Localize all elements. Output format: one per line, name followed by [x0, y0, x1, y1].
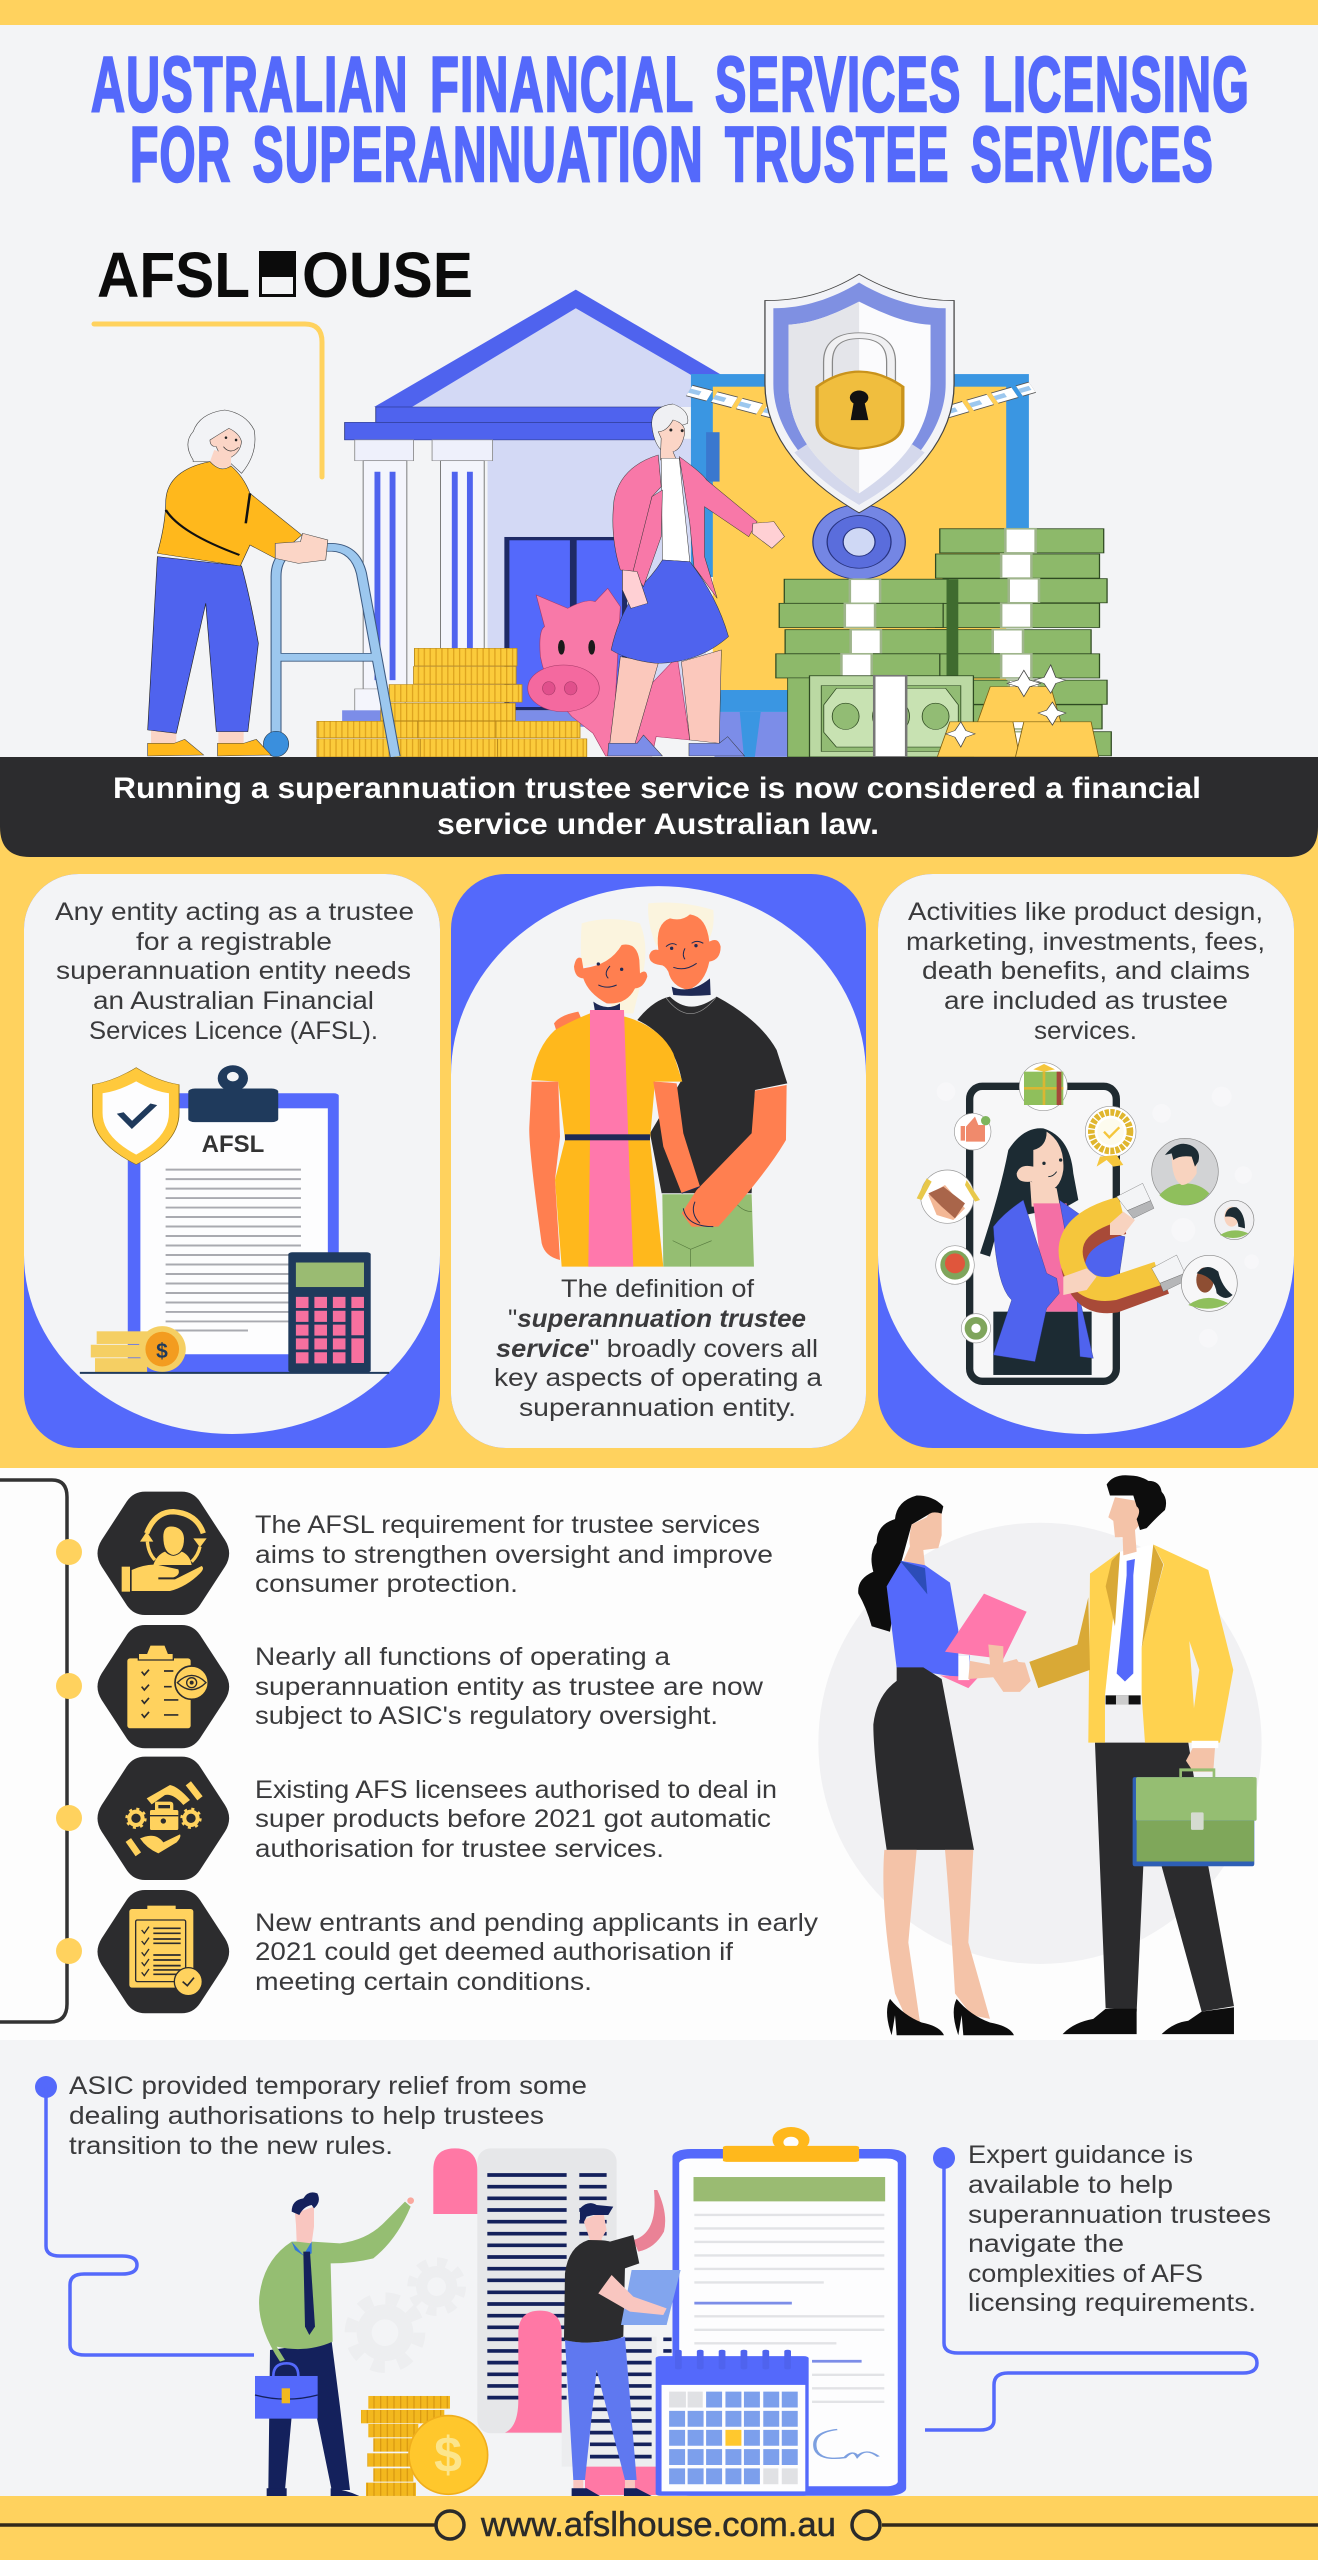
icon: hand holding person	[97, 1492, 229, 1615]
connector: left note	[35, 2076, 254, 2355]
item 4: deemed authorisation	[97, 1890, 819, 2013]
elderly woman in pink jacket	[608, 404, 784, 756]
panel: definition of superannuation trustee service	[451, 874, 866, 1448]
note: temporary relief: ASIC provided temporary relief from some	[69, 2072, 587, 2100]
panel text	[494, 1275, 822, 1422]
hero background objects	[317, 274, 1111, 757]
text: aims to strengthen oversight and improve	[255, 1541, 773, 1569]
note: expert guidance: superannuation trustees	[968, 2201, 1271, 2229]
panel text: marketing, investments, fees,	[906, 928, 1265, 956]
logo: AFSL House: OUSE	[302, 239, 473, 311]
panel text: The definition of	[561, 1275, 754, 1303]
panel text	[906, 898, 1265, 1045]
hero illustration	[148, 274, 1111, 757]
panel text: for a registrable	[136, 928, 332, 956]
note: expert guidance: available to help	[968, 2171, 1173, 2199]
text	[255, 1909, 819, 1996]
panel text: service " broadly covers all	[496, 1335, 818, 1363]
icon: clipboard checklist	[97, 1890, 229, 2013]
text: Existing AFS licensees authorised to deal in	[255, 1776, 777, 1804]
panel text: Any entity acting as a trustee	[55, 898, 414, 926]
icon: clipboard, shield, calculator, coins	[80, 1065, 389, 1373]
shield with padlock	[765, 274, 954, 579]
text: New entrants and pending applicants in early	[255, 1909, 819, 1937]
gears and document scroll	[351, 2148, 672, 2495]
gold coin stacks	[317, 648, 587, 757]
gold bars with sparkles	[937, 665, 1099, 757]
people and coin stack	[255, 2190, 681, 2496]
vault door with chains	[689, 374, 1032, 757]
text: Nearly all functions of operating a	[255, 1643, 670, 1671]
connector: right note	[925, 2147, 1257, 2430]
footer	[0, 2496, 1318, 2560]
text: authorisation for trustee services.	[255, 1835, 664, 1863]
panel text: services.	[1034, 1017, 1137, 1045]
panel text: are included as trustee	[944, 987, 1228, 1015]
icon: dollar on coin: $	[156, 1340, 168, 1363]
calendar	[656, 2351, 809, 2496]
banner: service under Australian law.	[437, 808, 879, 841]
text: 2021 could get deemed authorisation if	[255, 1938, 733, 1966]
text: consumer protection.	[255, 1570, 518, 1598]
panel text: key aspects of operating a	[494, 1364, 822, 1392]
elderly woman with walker	[148, 410, 395, 757]
panel text: Activities like product design,	[908, 898, 1263, 926]
piggy bank	[528, 588, 690, 756]
text: superannuation entity as trustee are now	[255, 1673, 764, 1701]
hero foreground people and piggy bank	[148, 404, 784, 757]
note: expert guidance	[968, 2141, 1271, 2317]
text	[255, 1776, 777, 1863]
text: meeting certain conditions.	[255, 1968, 592, 1996]
item 3: automatic authorisation	[97, 1757, 777, 1880]
logo: AFSL House: AFSL	[97, 239, 250, 311]
clipboard with form	[672, 2127, 906, 2496]
text: super products before 2021 got automatic	[255, 1805, 771, 1833]
panel text: an Australian Financial	[93, 987, 374, 1015]
icon: clipboard with eye	[97, 1625, 229, 1748]
illustration: team with scroll, clipboard and calendar	[255, 2127, 906, 2496]
panel text: Services Licence (AFSL).	[89, 1017, 378, 1045]
note: expert guidance: Expert guidance is	[968, 2141, 1193, 2169]
stacks of money	[776, 529, 1111, 757]
logo underline	[94, 324, 322, 477]
man in green shirt	[255, 2192, 414, 2496]
note: expert guidance: navigate the	[968, 2230, 1124, 2258]
banner: Running a superannuation trustee service is now considered a financial	[113, 772, 1201, 805]
banner	[0, 757, 1318, 857]
note: temporary relief: transition to the new rules.	[69, 2132, 393, 2160]
footer: www.afslhouse.com.au	[480, 2506, 836, 2544]
item 1: oversight and consumer protection	[97, 1492, 773, 1615]
man with briefcase	[993, 1475, 1257, 2034]
note: temporary relief: dealing authorisations to help trustees	[69, 2102, 544, 2130]
text: The AFSL requirement for trustee services	[255, 1511, 760, 1539]
text	[255, 1511, 773, 1598]
gold coin stack	[361, 2396, 488, 2496]
panel text	[55, 898, 414, 1045]
illustration: elderly couple	[529, 902, 787, 1267]
text: subject to ASIC's regulatory oversight.	[255, 1702, 718, 1730]
panel text: superannuation entity.	[519, 1394, 796, 1422]
man in black shirt	[564, 2190, 681, 2496]
text	[255, 1643, 764, 1730]
panel text: "superannuation trustee	[508, 1305, 806, 1333]
illustration: business handshake	[818, 1475, 1262, 2035]
logo: AFSL House	[97, 239, 473, 311]
icon: handshake with gears	[97, 1757, 229, 1880]
panel text: death benefits, and claims	[922, 957, 1250, 985]
note: temporary relief	[69, 2072, 587, 2160]
panel: activities included as trustee services	[878, 874, 1294, 1448]
woman with folder	[858, 1495, 1031, 2035]
timeline bracket	[0, 1480, 67, 2022]
note: expert guidance: licensing requirements.	[968, 2289, 1256, 2317]
panel text: superannuation entity needs	[56, 957, 411, 985]
panel: AFSL licence requirement	[24, 874, 440, 1448]
note: expert guidance: complexities of AFS	[968, 2260, 1203, 2288]
clipboard label: AFSL	[202, 1131, 264, 1158]
item 2: ASIC regulatory oversight	[97, 1625, 764, 1748]
dollar sign on coin: $	[434, 2427, 462, 2483]
bank building	[342, 290, 723, 727]
illustration: woman with magnet and phone	[917, 1063, 1259, 1381]
timeline dots	[56, 1539, 82, 1964]
title	[91, 40, 1250, 198]
